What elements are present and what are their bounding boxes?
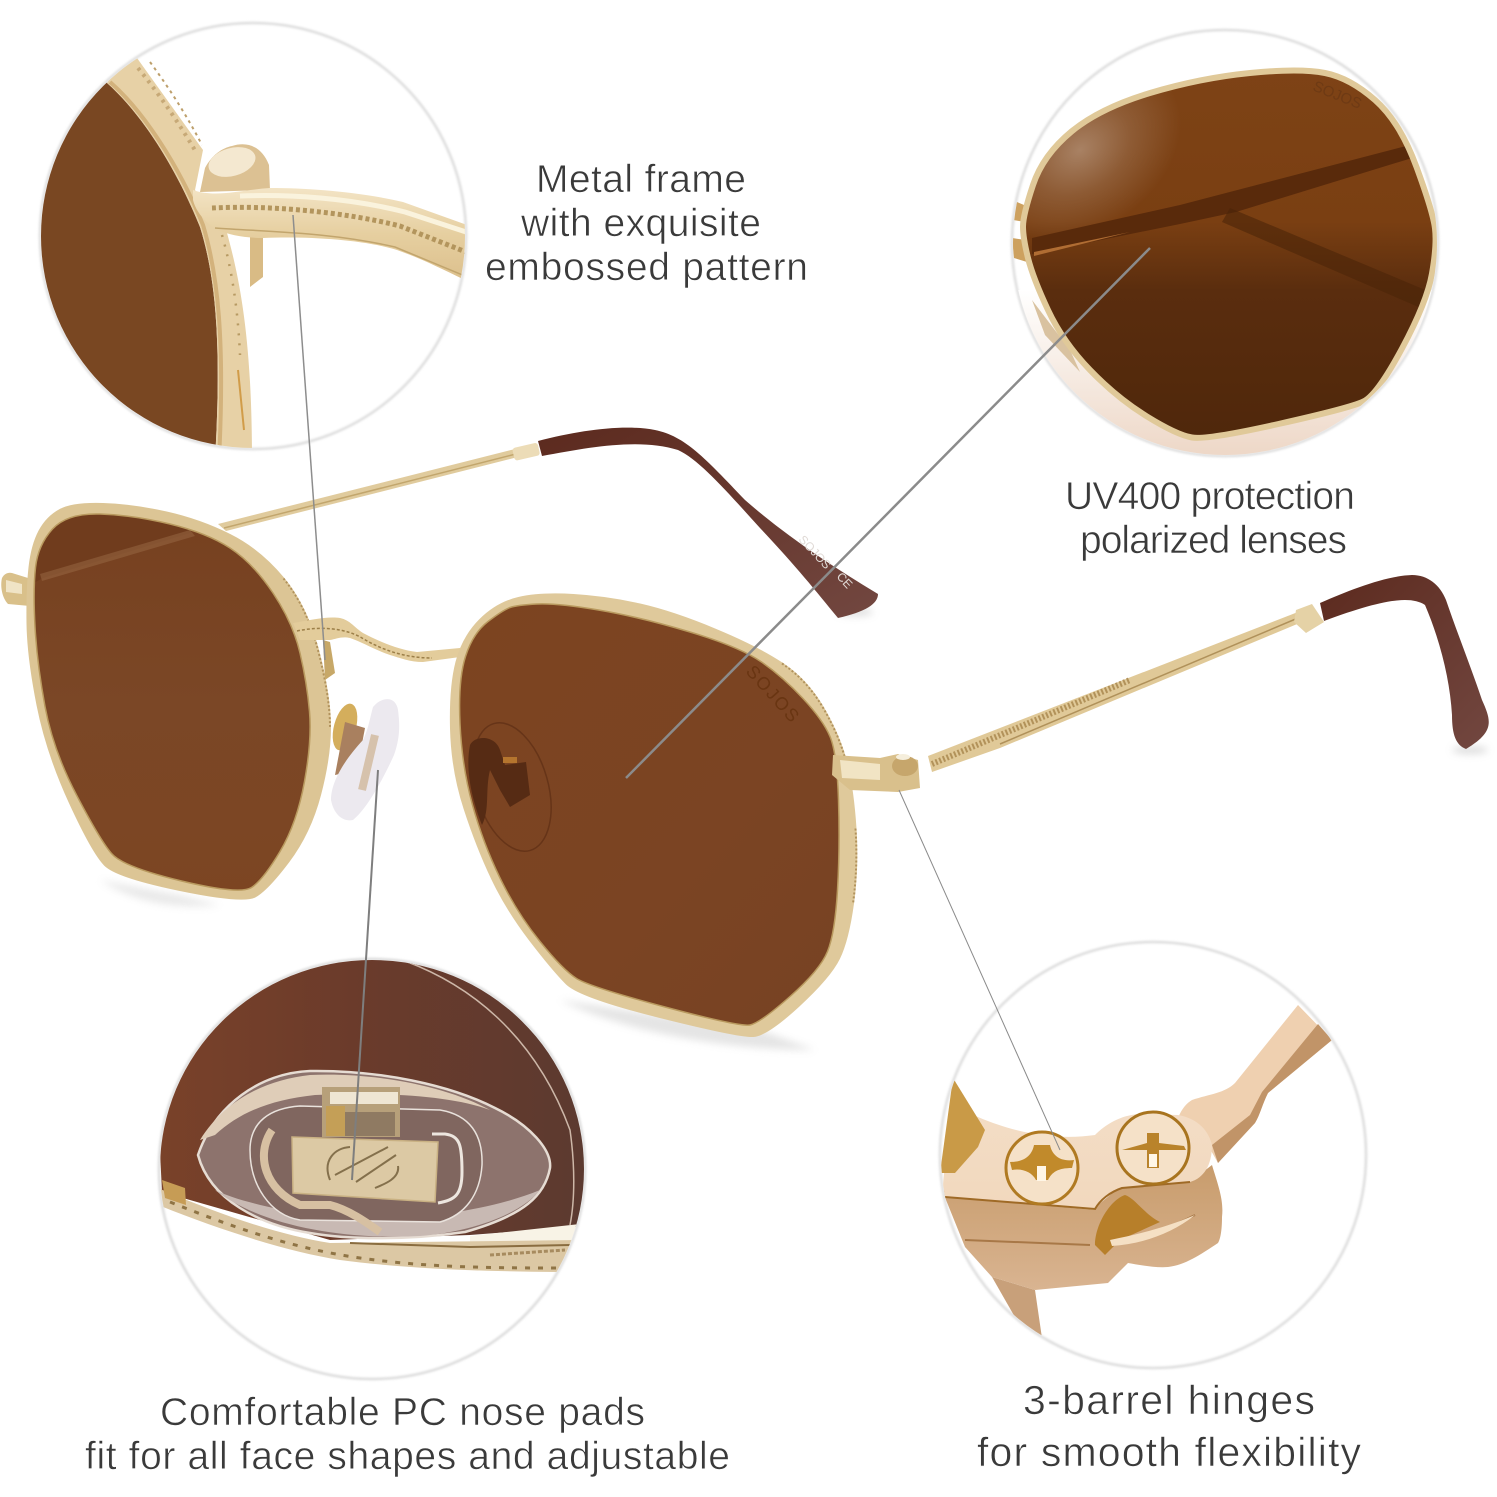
logo plate xyxy=(292,1137,438,1202)
left lens xyxy=(20,500,340,910)
right temple arm xyxy=(928,604,1324,772)
polarized lens rim xyxy=(1023,70,1436,438)
caption: nose pads: fit for all face shapes and adjustable xyxy=(85,1435,730,1478)
reflected temple arm xyxy=(1032,145,1412,254)
right temple tip xyxy=(1320,575,1489,749)
lens reflection of nose pad xyxy=(468,722,552,852)
lower frame leg xyxy=(992,1277,1042,1336)
panel: metal frame detail circle xyxy=(30,20,470,460)
embossed bridge xyxy=(293,617,460,680)
panel: UV400 lens detail circle xyxy=(1010,28,1440,458)
peach reflection beneath lens xyxy=(1018,290,1432,455)
caption: UV400 lenses xyxy=(1065,475,1355,562)
caption: UV400 lenses: UV400 protection xyxy=(1065,475,1355,518)
hinge side body xyxy=(942,1165,1222,1290)
back temple tip: SOJOS xyxy=(796,532,834,572)
right lens xyxy=(450,590,856,1040)
soft shadows xyxy=(100,608,1488,1050)
transparent nose pad xyxy=(198,1071,550,1238)
lens in metal frame detail xyxy=(41,82,218,445)
embossed temple arm xyxy=(193,188,470,280)
caption: hinges: for smooth flexibility xyxy=(977,1429,1362,1475)
lens logo: SOJOS xyxy=(742,661,804,727)
caption: UV400 lenses: polarized lenses xyxy=(1080,519,1347,562)
hinge seam xyxy=(965,1215,1195,1245)
hinge top surface xyxy=(942,1105,1212,1210)
rivet on temple xyxy=(200,142,270,192)
caption: metal frame: Metal frame xyxy=(536,158,746,201)
embossed gold edge xyxy=(940,1078,985,1173)
gold rim with embossing xyxy=(107,58,252,460)
temple seen behind lens xyxy=(1032,300,1080,372)
left hinge stub xyxy=(1,573,30,606)
white sliver xyxy=(470,1224,576,1242)
centre barrel xyxy=(1095,1195,1160,1255)
gold rim strip xyxy=(158,1180,580,1272)
panel: nose pad detail circle xyxy=(150,950,600,1379)
brown lens background xyxy=(150,950,600,1240)
nose pad arm and silicone pad xyxy=(328,699,399,820)
caption: metal frame: embossed pattern xyxy=(485,246,808,289)
lens edge highlight xyxy=(405,961,574,1225)
lens logo: SOJOS xyxy=(1311,78,1364,113)
main sunglasses xyxy=(1,428,1489,1050)
caption: metal frame: with exquisite xyxy=(520,202,761,245)
caption: hinges: 3-barrel hinges xyxy=(1023,1377,1315,1423)
leader line: lens detail xyxy=(626,248,1150,778)
right screw xyxy=(1117,1112,1189,1184)
back temple tip xyxy=(538,428,878,618)
temple arm xyxy=(1178,1005,1332,1163)
right hinge xyxy=(832,754,920,792)
caption: nose pads: Comfortable PC nose pads xyxy=(160,1391,645,1434)
leader line: nose pad detail xyxy=(352,770,378,1180)
caption: metal frame xyxy=(485,158,808,289)
left screw xyxy=(1006,1132,1078,1204)
caption: hinges xyxy=(977,1377,1362,1475)
polarized lens xyxy=(1026,74,1433,435)
back temple arm xyxy=(218,442,540,531)
back temple tip: CE xyxy=(834,569,855,591)
panel: hinge detail circle xyxy=(940,942,1366,1368)
leader line: frame detail xyxy=(293,215,325,660)
tab below temple xyxy=(250,233,263,287)
leader line: hinge detail xyxy=(899,790,1060,1150)
caption: nose pads xyxy=(85,1391,730,1478)
